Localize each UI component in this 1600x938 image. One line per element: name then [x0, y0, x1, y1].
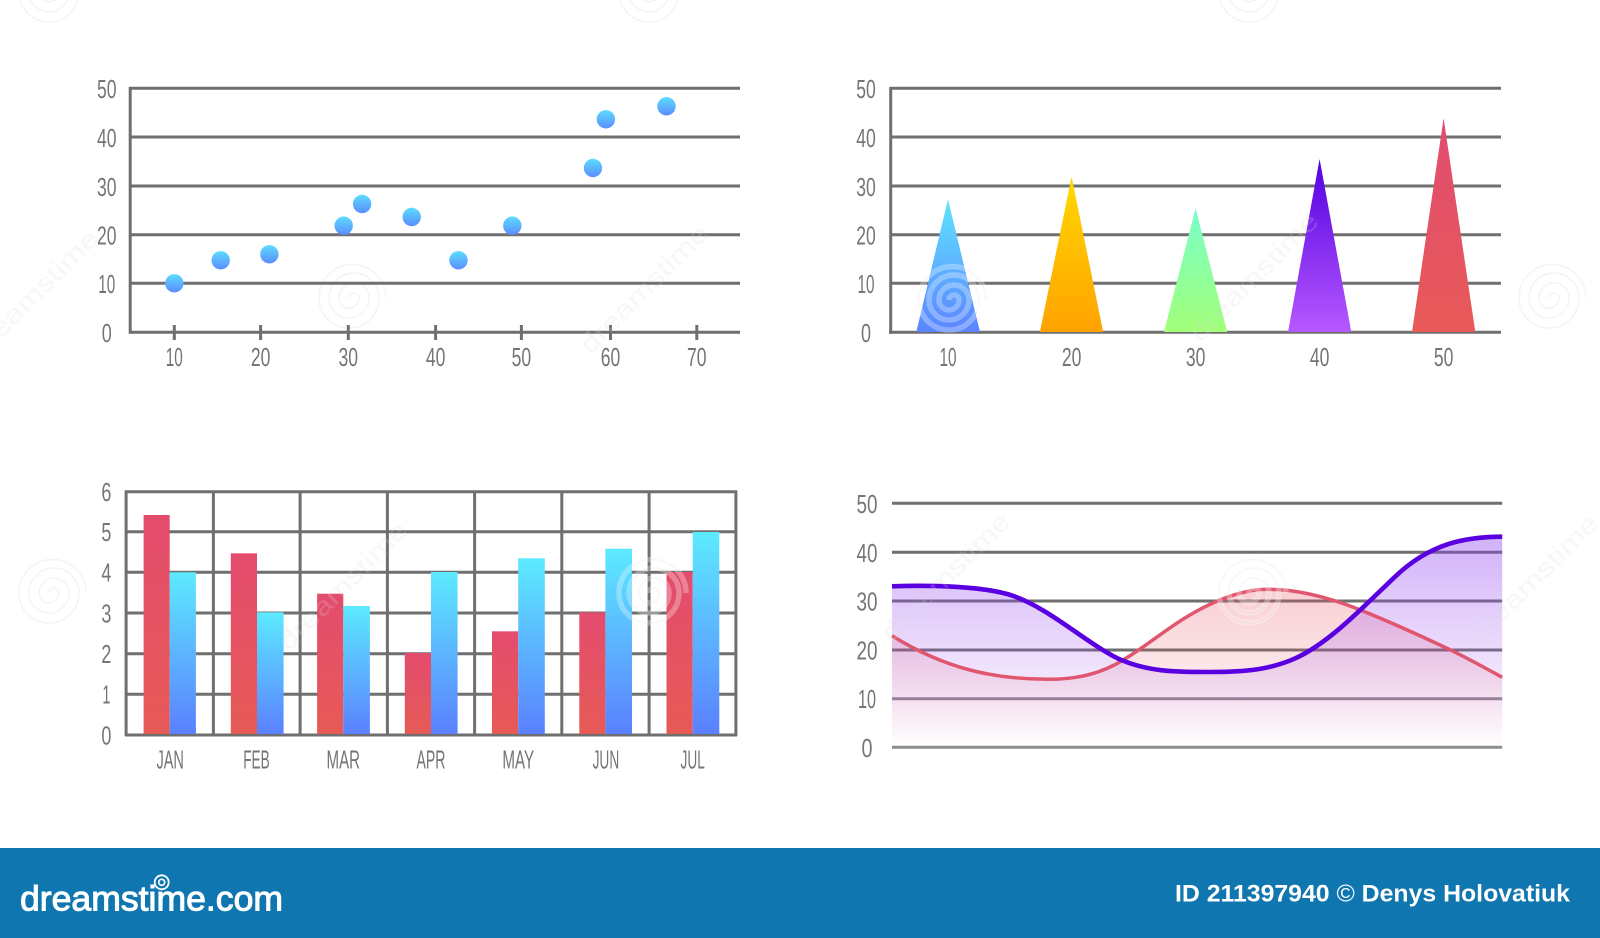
bar chart month labels: JUN: [593, 744, 619, 774]
scatter y-axis labels: 50: [97, 74, 117, 104]
scatter x-axis labels: 10: [166, 342, 183, 372]
panel: grouped bar chart: [101, 477, 737, 774]
scatter x-axis labels: 30: [339, 342, 358, 372]
scatter x-axis labels: 40: [426, 342, 445, 372]
scatter y-axis labels: 30: [97, 172, 117, 202]
scatter y-axis labels: 0: [102, 318, 112, 348]
red line: [892, 589, 1502, 679]
bar chart grid: [125, 490, 737, 736]
area chart y-axis labels: 40: [856, 538, 878, 568]
bar chart y-axis labels: [101, 477, 111, 750]
triangle chart grid and axes: [889, 87, 1501, 334]
area chart y-axis labels: 0: [862, 733, 872, 763]
bar chart month labels: MAR: [327, 744, 360, 774]
area chart y-axis labels: 50: [856, 489, 878, 519]
triangle bars: [916, 118, 1475, 332]
blue bars: [170, 532, 719, 734]
bar chart y-axis labels: 0: [101, 720, 111, 750]
scatter y-axis labels: 10: [98, 269, 115, 299]
area chart y-axis labels: 20: [856, 636, 878, 666]
panel: triangle chart: [856, 74, 1501, 372]
scatter x-axis labels: 20: [251, 342, 270, 372]
scatter x-axis labels: 60: [601, 342, 620, 372]
scatter data points: [165, 97, 676, 292]
triangle chart y-axis labels: [856, 74, 876, 348]
bar chart y-axis labels: 5: [101, 517, 111, 547]
bar chart y-axis labels: 6: [101, 477, 111, 507]
triangle chart y-axis labels: 20: [856, 220, 876, 250]
watermark text: dreamstime: [1183, 206, 1324, 347]
triangle chart x-axis labels: 20: [1062, 342, 1081, 372]
area chart grid: [892, 503, 1502, 747]
footer bar: [0, 848, 1600, 938]
footer credit: ID 211397940 © Denys Holovatiuk: [1175, 880, 1571, 907]
triangle chart x-axis labels: 50: [1434, 342, 1453, 372]
panel: area line chart: [856, 489, 1502, 763]
watermark spirals on white: [19, 0, 1586, 623]
area chart y-axis labels: 10: [858, 684, 876, 714]
bar chart y-axis labels: 1: [102, 680, 110, 710]
bar chart month labels: MAY: [502, 744, 534, 774]
area chart y-axis labels: 30: [856, 586, 878, 616]
bar chart y-axis labels: 4: [101, 558, 111, 588]
triangle chart x-axis labels: 10: [940, 342, 956, 372]
triangle chart y-axis labels: 30: [856, 172, 876, 202]
watermark text: dreamstime: [573, 218, 714, 359]
purple area fill: [892, 537, 1502, 747]
red bars: [144, 515, 693, 734]
triangle chart y-axis labels: 40: [856, 123, 876, 153]
scatter x-axis labels: 70: [687, 342, 707, 372]
purple line: [892, 537, 1502, 672]
triangle chart x-axis labels: 40: [1310, 342, 1329, 372]
bar chart month labels: JUL: [681, 744, 705, 774]
triangle chart x-axis labels: [940, 342, 1453, 372]
watermark text: dreamstime: [272, 515, 413, 656]
watermark text: dreamstime: [875, 506, 1016, 647]
watermark text: [0, 206, 1600, 656]
scatter y-axis labels: 40: [97, 123, 117, 153]
watermark text: dreamstime: [1463, 508, 1600, 649]
watermark spirals over charts: [619, 266, 1286, 623]
scatter y-axis labels: 20: [97, 220, 117, 250]
bar chart y-axis labels: 2: [101, 639, 111, 669]
bar chart y-axis labels: 3: [101, 598, 111, 628]
red area fill: [892, 589, 1502, 747]
triangle chart y-axis labels: 0: [861, 318, 871, 348]
triangle chart y-axis labels: 10: [858, 269, 874, 299]
triangle chart y-axis labels: 50: [856, 74, 876, 104]
bar chart month labels: JAN: [156, 744, 184, 774]
scatter x-axis labels: 50: [512, 342, 531, 372]
panel: scatter chart: [97, 74, 740, 372]
bar chart month labels: APR: [416, 744, 446, 774]
triangle chart x-axis labels: 30: [1186, 342, 1205, 372]
scatter grid and axes: [129, 87, 740, 340]
footer logo: dreamstime.com: [20, 880, 283, 918]
scatter x-axis labels: [166, 342, 707, 372]
scatter y-axis labels: [97, 74, 117, 348]
bar chart month labels: [156, 744, 705, 774]
area chart y-axis labels: [856, 489, 878, 763]
bar chart month labels: FEB: [243, 744, 270, 774]
